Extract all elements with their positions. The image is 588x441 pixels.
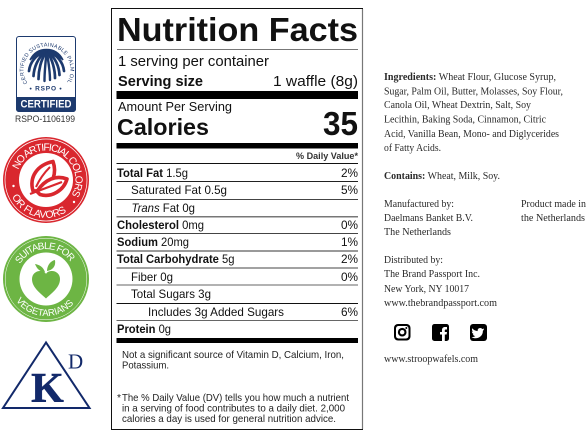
servings: 1 waffle (8g) — [273, 73, 358, 90]
text block: distributor: The Brand Passport Inc. — [384, 269, 480, 280]
icon: no artificial colors or flavors badge — [3, 137, 89, 223]
text block: ingredients — [384, 72, 563, 154]
heading: nutrition facts: Nutrition Facts — [117, 11, 358, 48]
calories: Amount Per Serving — [118, 100, 232, 114]
table: nutrients: Fiber 0g — [131, 270, 173, 284]
text block: allergens: Contains: Wheat, Milk, Soy. — [384, 171, 500, 182]
icon: suitable for vegetarians badge: SUITABLE FOR — [16, 242, 74, 263]
text block: distributor: www.thebrandpassport.com — [384, 298, 497, 309]
servings: Serving size — [118, 73, 203, 90]
icon: kosher dairy triangle: K — [31, 366, 64, 412]
icon: palm fronds — [29, 50, 64, 81]
icon: RSPO certified badge: CERTIFIED SUSTAINABLE PALM OIL — [20, 42, 74, 84]
icon: twitter — [470, 324, 487, 341]
daily value footnote: calories a day is used for general nutrition advice. — [122, 414, 336, 425]
text block: manufacturer: Manufactured by: — [384, 199, 454, 210]
table: nutrients: 6% — [341, 305, 358, 319]
text block: manufacturer: The Netherlands — [384, 227, 451, 238]
text block: manufacturer — [384, 199, 473, 238]
icon: RSPO certified badge: • RSPO • — [30, 86, 62, 92]
text block: ingredients: of Fatty Acids. — [384, 143, 441, 154]
icon: RSPO certified badge: CERTIFIED — [20, 98, 72, 110]
daily value footnote: in a serving of food contributes to a daily diet. 2,000 — [122, 404, 345, 414]
table: nutrients — [116, 166, 358, 336]
panel: nutrition facts label — [112, 8, 362, 430]
table: nutrients: Total Carbohydrate 5g — [117, 252, 234, 266]
table: nutrients: Protein 0g — [117, 322, 171, 336]
vitamin note: Not a significant source of Vitamin D, Calcium, Iron, — [122, 350, 344, 361]
icon: leaves — [30, 162, 67, 195]
icon: heart apple — [32, 260, 60, 298]
table: nutrients: 2% — [341, 166, 358, 180]
table: nutrients: Includes 3g Added Sugars — [148, 305, 284, 319]
text block: origin — [521, 199, 586, 224]
icon: no artificial colors or flavors badge: OR FLAVORS — [13, 194, 66, 218]
daily value heading: % Daily Value* — [296, 151, 359, 161]
icon: RSPO certified badge — [16, 36, 76, 112]
table: nutrients: Saturated Fat 0.5g — [131, 183, 227, 197]
text block: distributor: Distributed by: — [384, 255, 443, 266]
text block: distributor — [384, 255, 497, 309]
vitamin note: Potassium. — [122, 360, 169, 372]
vitamin note — [122, 350, 344, 372]
table: nutrients: 0% — [341, 218, 358, 232]
table: nutrients: Total Sugars 3g — [131, 287, 211, 301]
icon: kosher dairy triangle — [3, 342, 90, 412]
text block: origin: Product made in — [521, 199, 586, 210]
daily value footnote: The % Daily Value (DV) tells you how much a nutrient — [122, 393, 349, 404]
servings — [118, 53, 358, 90]
daily value footnote: * — [117, 393, 121, 404]
calories: 35 — [323, 105, 358, 142]
calories: Calories — [117, 114, 209, 140]
text block: ingredients: Acid, Vanilla Bean, Mono- and Diglycerides — [384, 129, 559, 140]
text block: ingredients: Ingredients: Wheat Flour, Glucose Syrup, — [384, 72, 556, 83]
table: nutrients: 5% — [341, 183, 358, 197]
RSPO licence number: RSPO-1106199 — [15, 114, 75, 124]
text block: manufacturer: Daelmans Banket B.V. — [384, 213, 473, 224]
table: nutrients: Trans Fat 0g — [132, 201, 195, 215]
text block: origin: the Netherlands — [521, 213, 585, 224]
icon: suitable for vegetarians badge — [3, 236, 89, 322]
website link: www.stroopwafels.com — [384, 354, 478, 365]
text block: distributor: New York, NY 10017 — [384, 284, 469, 295]
text block: ingredients: Canola Oil, Wheat Dextrin, Salt, Soy — [384, 100, 531, 111]
calories — [117, 100, 358, 142]
table: nutrients: 0% — [341, 270, 358, 284]
table: nutrients: Cholesterol 0mg — [117, 218, 204, 232]
icon: suitable for vegetarians badge: VEGETARIANS — [18, 296, 73, 316]
icon: no artificial colors or flavors badge: NO ARTIFICIAL COLORS — [12, 143, 83, 197]
daily value footnote — [117, 393, 349, 425]
table: nutrients: 1% — [341, 235, 358, 249]
icon: instagram — [394, 324, 410, 340]
icon: kosher dairy triangle: D — [68, 350, 83, 374]
text block: ingredients: Sugar, Palm Oil, Butter, Molasses, Soy Flour, — [384, 86, 563, 98]
table: nutrients: Total Fat 1.5g — [117, 166, 188, 180]
icon: facebook — [432, 324, 449, 341]
table: nutrients: Sodium 20mg — [117, 235, 189, 249]
table: nutrients: 2% — [341, 252, 358, 266]
servings: 1 serving per container — [118, 53, 269, 70]
text block: ingredients: Lecithin, Baking Soda, Cinnamon, Citric — [384, 114, 547, 126]
